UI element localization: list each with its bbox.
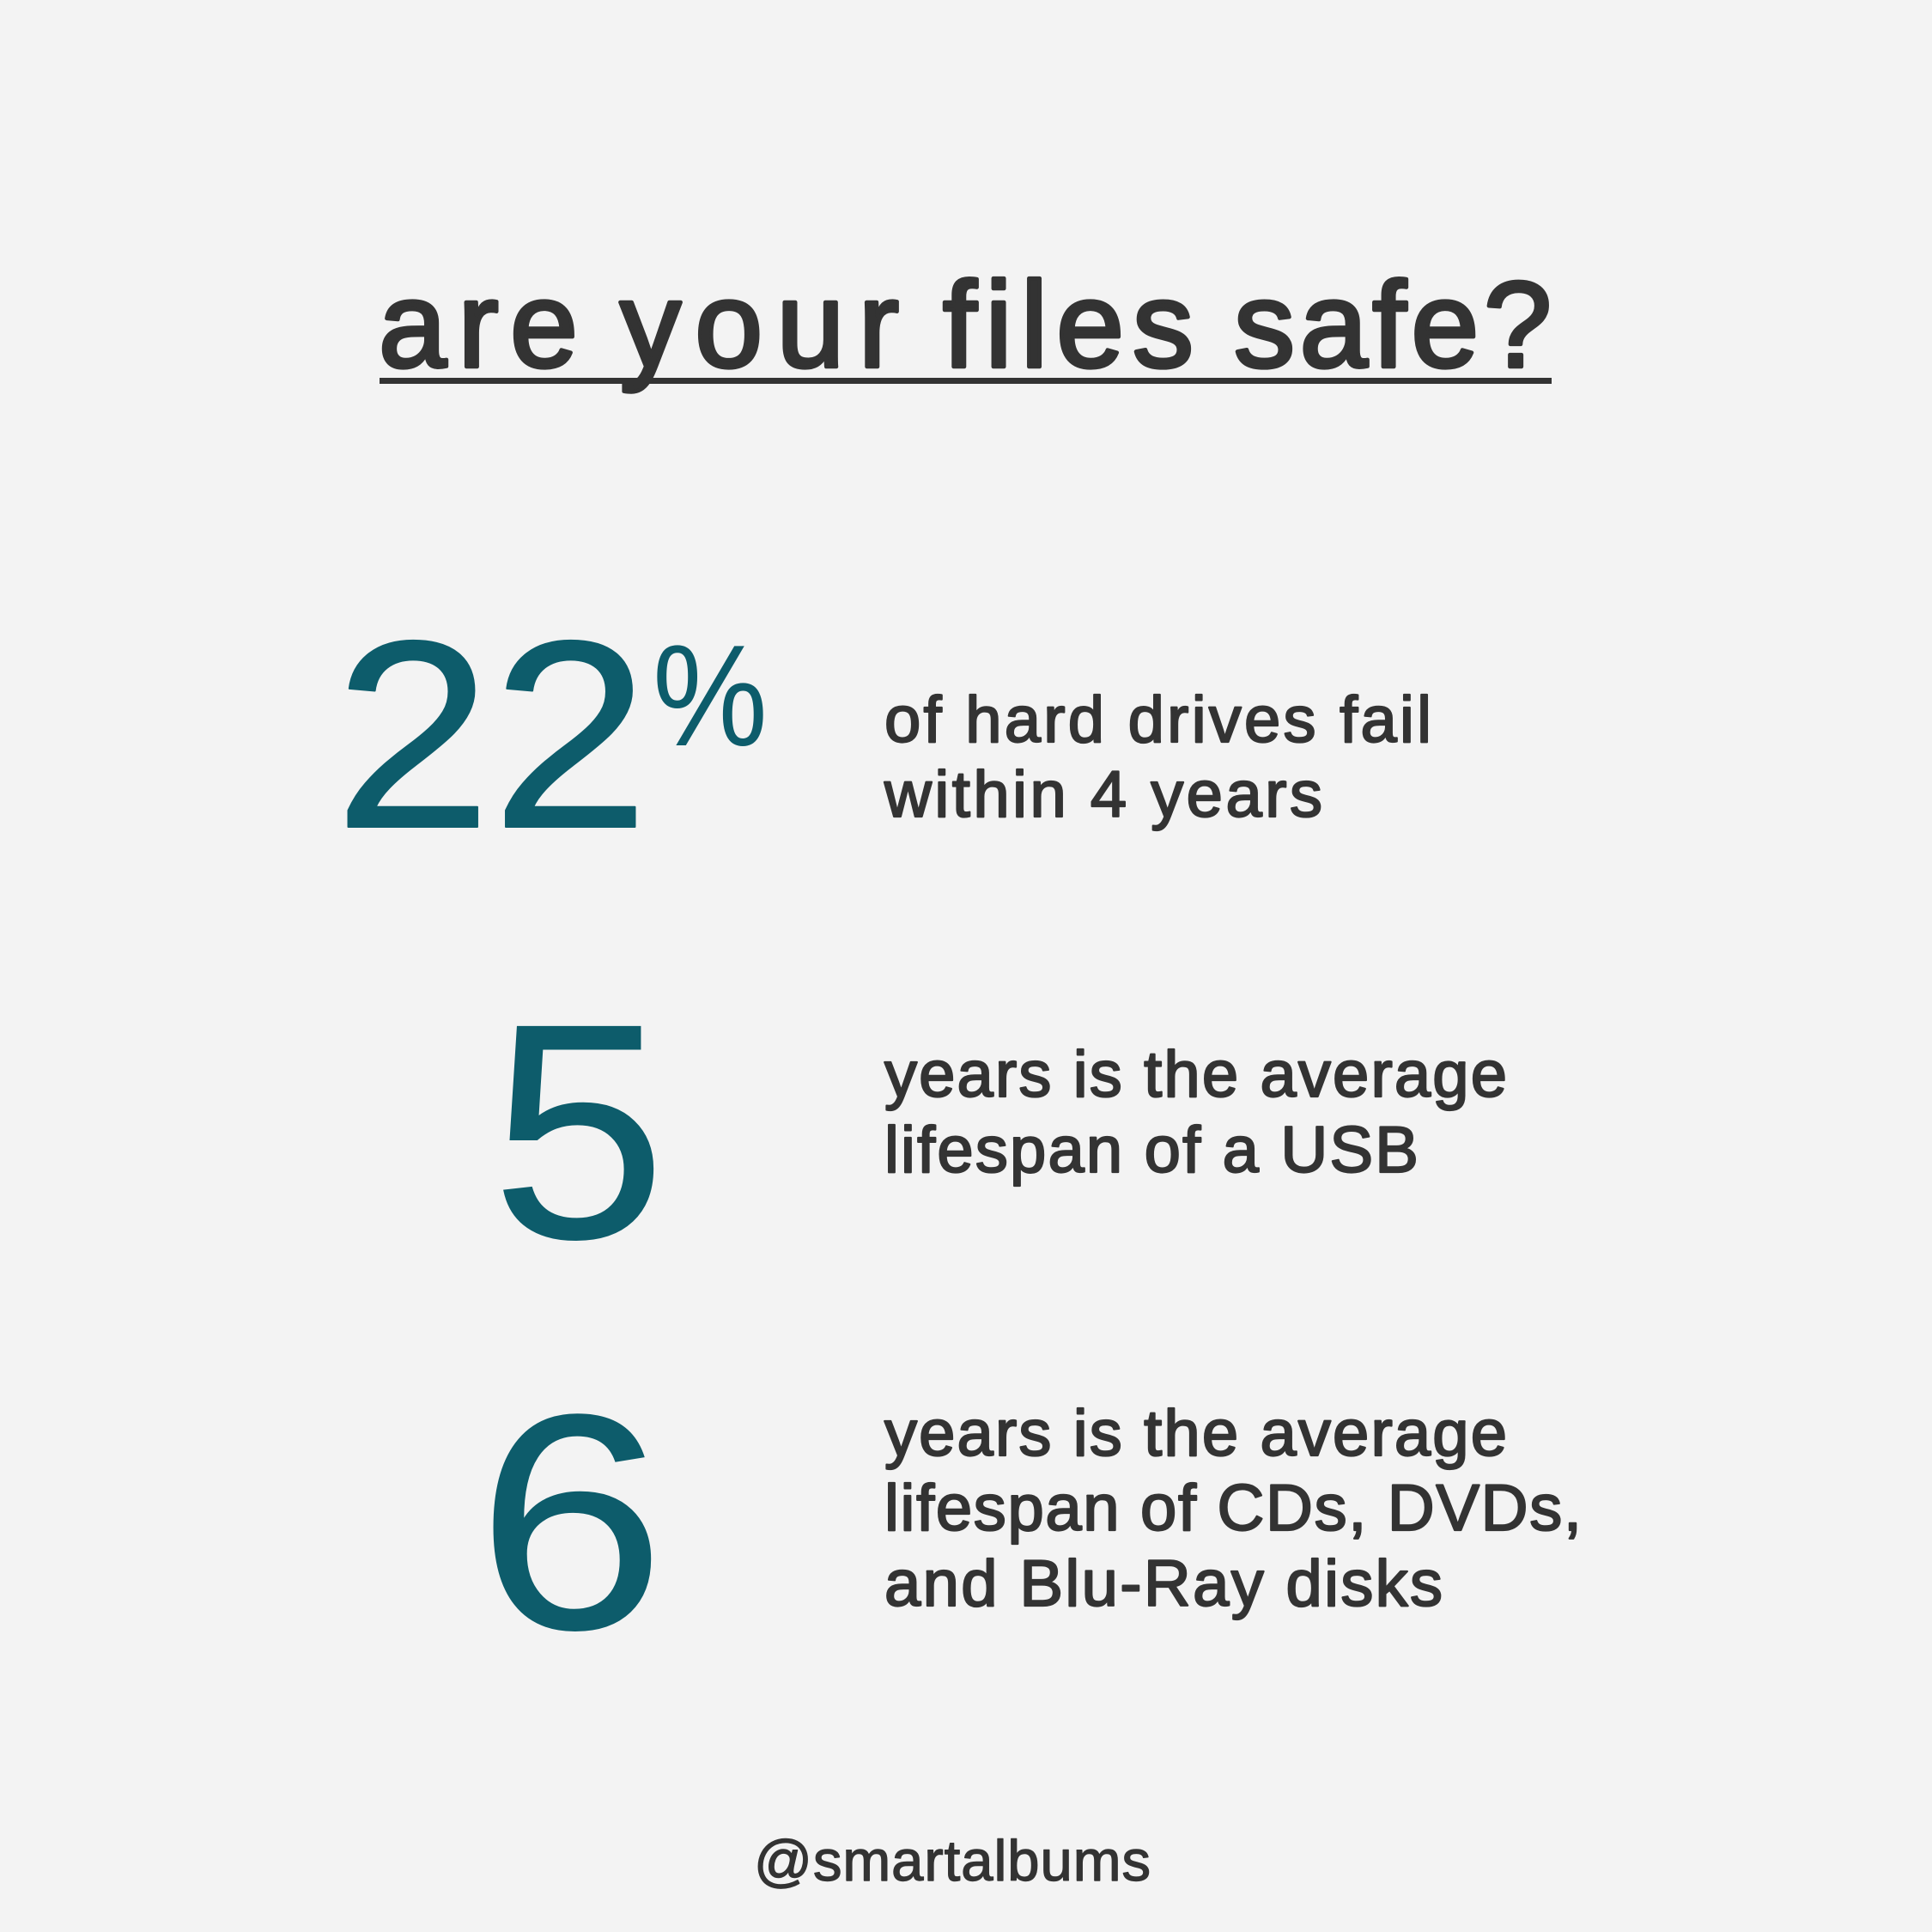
title: files xyxy=(943,257,1194,393)
description: years is the average xyxy=(884,1397,1507,1470)
description: lifespan of CDs, DVDs, xyxy=(884,1472,1582,1545)
stat: 5 years USB xyxy=(491,960,1507,1303)
number: 5: 5 xyxy=(491,960,666,1303)
number: 22% xyxy=(334,585,768,884)
footer handle: @smartalbums xyxy=(754,1829,1151,1893)
description xyxy=(884,683,1431,831)
description: within 4 years xyxy=(884,758,1322,831)
title: are xyxy=(379,257,578,393)
description: lifespan of a USB xyxy=(884,1114,1419,1187)
title: safe? xyxy=(1234,257,1552,393)
stat: 6 years CDs xyxy=(477,1351,1582,1693)
description: years is the average xyxy=(884,1038,1507,1111)
number: 6: 6 xyxy=(477,1351,665,1693)
title xyxy=(379,257,1552,393)
description: of hard drives fail xyxy=(884,683,1431,756)
description: and Blu-Ray disks xyxy=(884,1547,1443,1620)
description xyxy=(884,1038,1507,1187)
stat: 22% of hard drives xyxy=(334,585,1431,884)
description xyxy=(884,1397,1582,1620)
number: 22%: % xyxy=(653,615,768,776)
number: 22%: 22 xyxy=(334,585,649,884)
title: your xyxy=(620,257,899,393)
